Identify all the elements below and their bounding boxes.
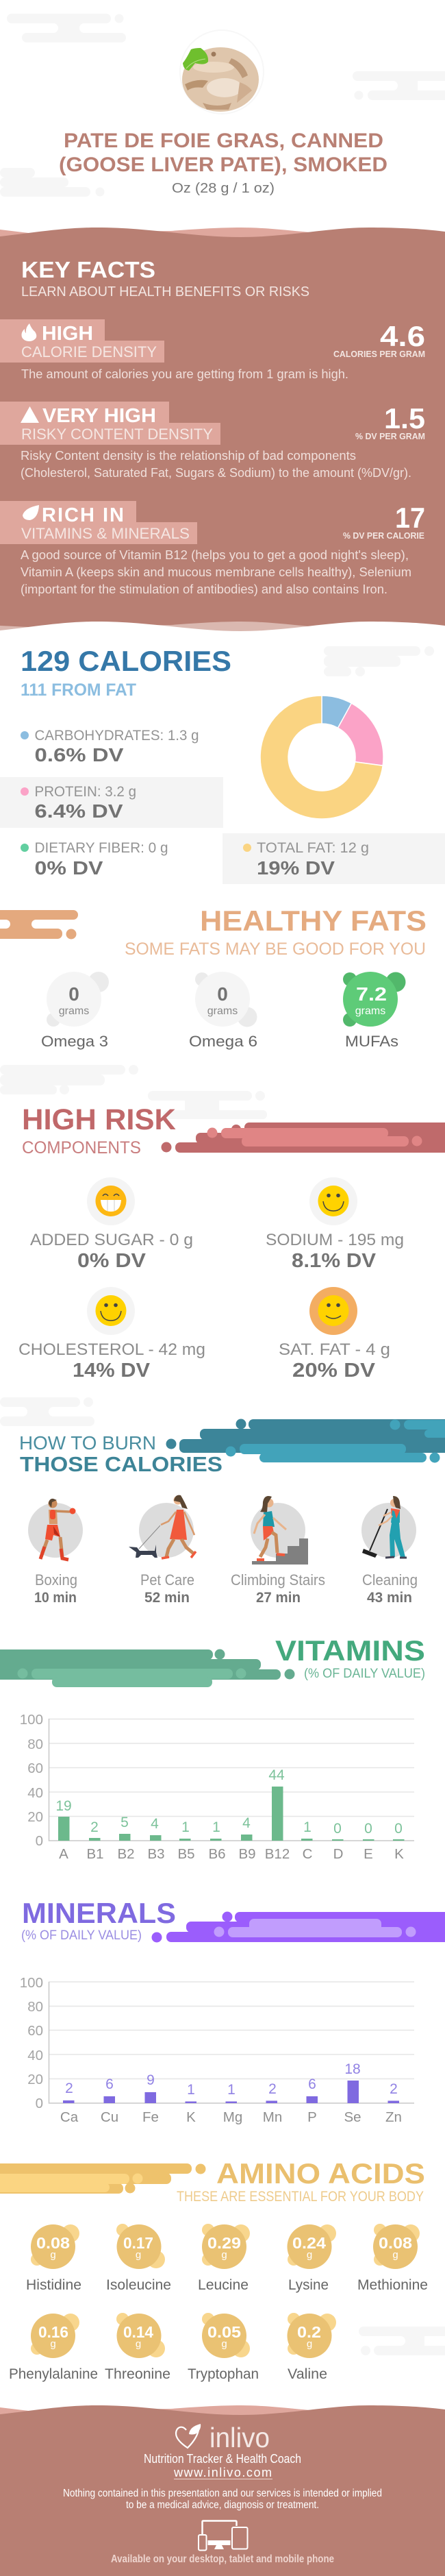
carbohydrates: CARBOHYDRATES: 1.3 g bbox=[34, 728, 199, 744]
heading: calories: 111 FROM FAT bbox=[21, 680, 136, 700]
amino bubbles: g bbox=[221, 2338, 227, 2350]
decoration: high risk bbox=[162, 1123, 445, 1153]
bar chart: minerals: 6 bbox=[308, 2076, 316, 2092]
decoration: vitamins bbox=[0, 1649, 294, 1687]
amino names: Lysine bbox=[288, 2277, 329, 2293]
icon: flame bbox=[22, 323, 36, 341]
bar chart: minerals: Fe bbox=[142, 2109, 159, 2125]
sodium: 8.1% DV bbox=[292, 1250, 377, 1272]
bar chart: vitamins: B6 bbox=[208, 1846, 226, 1862]
activity labels: Pet Care bbox=[140, 1571, 194, 1588]
logo bbox=[176, 2422, 270, 2453]
bar chart: minerals: Ca bbox=[60, 2109, 79, 2125]
heading: vitamins bbox=[275, 1634, 425, 1681]
heading: minerals bbox=[21, 1897, 176, 1943]
fact: vitamins and minerals: VITAMINS & MINERALS bbox=[21, 525, 190, 542]
bar chart: minerals: 80 bbox=[27, 1999, 43, 2015]
bar chart: minerals: 20 bbox=[27, 2072, 43, 2087]
bar chart: vitamins: C bbox=[303, 1846, 313, 1862]
activity durations: 43 min bbox=[367, 1590, 412, 1606]
title bbox=[59, 130, 387, 176]
activity: boxing bbox=[28, 1499, 83, 1560]
bar chart: vitamins: K bbox=[394, 1846, 404, 1862]
decoration: burn bbox=[166, 1419, 445, 1462]
bar chart: vitamins: 0 bbox=[364, 1821, 372, 1837]
activity labels bbox=[35, 1571, 418, 1588]
fact: risky content density: % DV PER GRAM bbox=[355, 431, 425, 441]
activity: cleaning bbox=[361, 1496, 416, 1558]
bar chart: minerals: 40 bbox=[27, 2048, 43, 2063]
donut chart bbox=[260, 696, 383, 819]
bar chart: vitamins: 44 bbox=[268, 1767, 285, 1783]
heading: amino acids bbox=[177, 2157, 425, 2205]
heading: burn bbox=[19, 1432, 222, 1476]
heading: high risk bbox=[22, 1103, 176, 1157]
disclaimer: to be a medical advice, diagnosis or treatment. bbox=[126, 2499, 319, 2511]
total fat bbox=[243, 840, 369, 879]
bar chart: minerals: 60 bbox=[27, 2023, 43, 2039]
sodium: SODIUM - 195 mg bbox=[266, 1231, 404, 1249]
saturated fat: SAT. FAT - 4 g bbox=[279, 1340, 390, 1359]
heading: amino acids: AMINO ACIDS bbox=[216, 2157, 425, 2189]
bar chart: minerals: 2 bbox=[65, 2081, 73, 2096]
bar chart: vitamins: B2 bbox=[117, 1846, 135, 1862]
heading: key facts bbox=[21, 257, 309, 299]
added sugar: ADDED SUGAR - 0 g bbox=[30, 1231, 193, 1249]
amino names: Phenylalanine bbox=[9, 2366, 98, 2382]
heading: calories bbox=[21, 645, 231, 700]
saturated fat: 20% DV bbox=[292, 1360, 376, 1382]
amino bubbles: g bbox=[136, 2338, 141, 2350]
amino bubbles: g bbox=[50, 2249, 56, 2261]
fact: vitamins and minerals: A good source of Vitamin B12 (helps you to get a good night's sleep), bbox=[21, 548, 409, 562]
amino names: Tryptophan bbox=[188, 2366, 259, 2382]
activity labels: Cleaning bbox=[362, 1571, 418, 1588]
amino bubbles: g bbox=[307, 2249, 312, 2261]
website link: www.inlivo.com bbox=[173, 2466, 272, 2479]
bar chart: minerals: K bbox=[186, 2109, 196, 2125]
activity durations: 10 min bbox=[34, 1590, 77, 1606]
omega 6: Omega 6 bbox=[189, 1033, 257, 1050]
fact: risky content density: 1.5 bbox=[384, 402, 425, 434]
sodium bbox=[266, 1177, 404, 1272]
panel: key facts bbox=[0, 228, 445, 634]
amino bubbles: 0.08 bbox=[379, 2234, 412, 2252]
icon: warning bbox=[21, 406, 39, 423]
bar chart: minerals: 2 bbox=[390, 2081, 398, 2097]
fact: risky content density: (Cholesterol, Saturated Fat, Sugars & Sodium) to the amount (%DV/gr). bbox=[21, 466, 411, 480]
activity durations: 52 min bbox=[144, 1590, 190, 1606]
amino names: Threonine bbox=[105, 2366, 170, 2382]
fact: calorie density: 4.6 bbox=[380, 320, 425, 352]
amino bubbles: 0.05 bbox=[207, 2323, 241, 2341]
amino names: Valine bbox=[288, 2366, 327, 2382]
fact: risky content density: RISKY CONTENT DENSITY bbox=[21, 426, 213, 443]
bar chart: vitamins bbox=[20, 1712, 414, 1862]
mufas: grams bbox=[355, 1005, 385, 1017]
cholesterol: 14% DV bbox=[73, 1360, 151, 1382]
protein: PROTEIN: 3.2 g bbox=[34, 784, 136, 800]
fact: calorie density bbox=[0, 319, 425, 381]
bar chart: vitamins: E bbox=[364, 1846, 373, 1862]
bar chart: minerals: Mg bbox=[223, 2109, 242, 2125]
heading: vitamins: (% OF DAILY VALUE) bbox=[304, 1667, 425, 1681]
bar chart: vitamins: A bbox=[59, 1846, 68, 1862]
bar chart: vitamins: B3 bbox=[147, 1846, 165, 1862]
amino names: Histidine bbox=[26, 2277, 81, 2293]
omega 6 bbox=[189, 972, 257, 1050]
amino bubbles: 0.2 bbox=[297, 2323, 321, 2341]
heading: healthy fats bbox=[125, 905, 427, 959]
omega 6: grams bbox=[207, 1005, 238, 1017]
omega 3 bbox=[41, 972, 109, 1050]
bar chart: vitamins: 60 bbox=[27, 1761, 43, 1776]
fact: risky content density: VERY HIGH bbox=[42, 405, 156, 427]
fact: vitamins and minerals: Vitamin A (keeps skin and mucous membrane cells healthy), Selenium bbox=[21, 565, 411, 579]
amino bubbles bbox=[31, 2224, 420, 2358]
bar chart: minerals: Zn bbox=[385, 2109, 402, 2125]
heading: high risk: COMPONENTS bbox=[22, 1138, 141, 1157]
fact: vitamins and minerals: (important for the stimulation of antibodies) and also contains Iron. bbox=[21, 582, 387, 596]
panel: burn calories bbox=[19, 1419, 445, 1606]
title: (GOOSE LIVER PATE), SMOKED bbox=[59, 154, 387, 176]
bar chart: vitamins: 4 bbox=[151, 1816, 159, 1832]
bar chart: minerals bbox=[20, 1975, 414, 2125]
bar chart: minerals: Mn bbox=[263, 2109, 282, 2125]
fact: calorie density: The amount of calories you are getting from 1 gram is high. bbox=[21, 367, 348, 381]
bar chart: minerals: Cu bbox=[101, 2109, 118, 2125]
amino bubbles: g bbox=[307, 2338, 312, 2350]
amino bubbles: 0.14 bbox=[123, 2323, 153, 2341]
amino bubbles: 0.17 bbox=[123, 2234, 153, 2252]
decoration: minerals bbox=[152, 1912, 445, 1942]
bar chart: minerals: 2 bbox=[268, 2081, 277, 2097]
panel: calories bbox=[0, 645, 445, 884]
heading: high risk: HIGH RISK bbox=[22, 1103, 176, 1136]
mufas: 7.2 bbox=[356, 983, 387, 1005]
bar chart: minerals: 9 bbox=[147, 2072, 155, 2088]
heading: minerals: MINERALS bbox=[22, 1897, 176, 1929]
bar chart: vitamins: D bbox=[333, 1846, 343, 1862]
amino bubbles: 0.08 bbox=[36, 2234, 70, 2252]
tagline: Nutrition Tracker & Health Coach bbox=[144, 2452, 301, 2466]
bar chart: vitamins: 80 bbox=[27, 1737, 43, 1752]
total fat: TOTAL FAT: 12 g bbox=[257, 840, 369, 856]
amino bubbles: g bbox=[136, 2249, 141, 2261]
panel: vitamins bbox=[0, 1634, 425, 1862]
bar chart: vitamins: 40 bbox=[27, 1785, 43, 1801]
omega 3: 0 bbox=[68, 983, 79, 1005]
bar chart: vitamins: 1 bbox=[181, 1819, 190, 1835]
protein bbox=[21, 784, 136, 822]
bar chart: vitamins: 1 bbox=[303, 1819, 312, 1835]
amino bubbles: g bbox=[392, 2249, 398, 2261]
carbohydrates: 0.6% DV bbox=[34, 744, 124, 765]
amino names bbox=[9, 2277, 428, 2382]
mufas: MUFAs bbox=[345, 1033, 398, 1050]
bar chart: vitamins: 100 bbox=[20, 1712, 43, 1728]
title: PATE DE FOIE GRAS, CANNED bbox=[64, 130, 383, 152]
logo: inlivo bbox=[209, 2422, 270, 2453]
bar chart: vitamins: B1 bbox=[86, 1846, 104, 1862]
bar chart: vitamins: 4 bbox=[242, 1815, 251, 1831]
bar chart: vitamins: 0 bbox=[36, 1833, 43, 1849]
heading: burn: THOSE CALORIES bbox=[20, 1452, 222, 1476]
activity durations bbox=[34, 1590, 412, 1606]
amino bubbles: g bbox=[221, 2249, 227, 2261]
bar chart: minerals: 6 bbox=[105, 2076, 114, 2092]
panel: amino acids bbox=[0, 2157, 445, 2382]
icon: devices bbox=[199, 2520, 248, 2551]
amino bubbles: 0.16 bbox=[38, 2323, 68, 2341]
amino names: Methionine bbox=[357, 2277, 428, 2293]
carbohydrates bbox=[21, 728, 199, 765]
mufas bbox=[343, 972, 405, 1050]
activity labels: Climbing Stairs bbox=[231, 1571, 325, 1588]
bar chart: minerals: 100 bbox=[20, 1975, 43, 1991]
decoration: amino acids bbox=[0, 2163, 205, 2194]
fact: vitamins and minerals: % DV PER CALORIE bbox=[343, 530, 424, 541]
disclaimer: Nothing contained in this presentation and our services is intended or implied bbox=[63, 2488, 382, 2499]
heading: burn: HOW TO BURN bbox=[19, 1432, 156, 1453]
bar chart: vitamins: 5 bbox=[120, 1815, 129, 1830]
omega 3: Omega 3 bbox=[41, 1033, 108, 1050]
fact: calorie density: CALORIE DENSITY bbox=[21, 343, 157, 360]
availability note: Available on your desktop, tablet and mobile phone bbox=[111, 2553, 334, 2565]
bar chart: vitamins: 0 bbox=[394, 1821, 403, 1837]
dietary fiber: 0% DV bbox=[34, 857, 103, 879]
fact: risky content density: Risky Content density is the relationship of bad components bbox=[21, 449, 356, 463]
activity labels: Boxing bbox=[35, 1571, 77, 1588]
bar chart: vitamins: 20 bbox=[27, 1809, 43, 1825]
saturated fat bbox=[279, 1287, 390, 1382]
amino bubbles: g bbox=[50, 2338, 56, 2350]
protein: 6.4% DV bbox=[34, 800, 123, 822]
added sugar: 0% DV bbox=[77, 1250, 147, 1272]
bar chart: minerals: 0 bbox=[36, 2096, 43, 2111]
bar chart: vitamins: B9 bbox=[238, 1846, 256, 1862]
bar chart: vitamins: 0 bbox=[333, 1821, 342, 1837]
fact: calorie density: CALORIES PER GRAM bbox=[333, 349, 425, 359]
omega 6: 0 bbox=[217, 983, 228, 1005]
total fat: 19% DV bbox=[257, 857, 335, 879]
disclaimer bbox=[63, 2488, 382, 2511]
dietary fiber bbox=[21, 840, 168, 879]
footer bbox=[0, 2405, 445, 2576]
food photo bbox=[182, 47, 259, 112]
bar chart: minerals: P bbox=[307, 2109, 317, 2125]
icon: leaf bbox=[23, 505, 39, 520]
cholesterol: CHOLESTEROL - 42 mg bbox=[18, 1340, 205, 1359]
dietary fiber: DIETARY FIBER: 0 g bbox=[34, 840, 168, 856]
heading: vitamins: VITAMINS bbox=[275, 1634, 425, 1667]
amino names: Leucine bbox=[198, 2277, 249, 2293]
activity durations: 27 min bbox=[256, 1590, 301, 1606]
added sugar bbox=[30, 1177, 193, 1272]
bar chart: minerals: Se bbox=[344, 2109, 361, 2125]
panel: high risk bbox=[18, 1103, 445, 1382]
cholesterol bbox=[18, 1287, 205, 1382]
bar chart: vitamins: 1 bbox=[212, 1819, 220, 1835]
omega 3: grams bbox=[59, 1005, 89, 1017]
bar chart: minerals: 1 bbox=[187, 2082, 195, 2098]
serving size: Oz (28 g / 1 oz) bbox=[172, 181, 275, 196]
activity: climbing stairs bbox=[251, 1496, 308, 1565]
panel: minerals bbox=[20, 1897, 445, 2125]
bar chart: vitamins: 19 bbox=[55, 1798, 72, 1814]
amino bubbles: 0.24 bbox=[292, 2234, 326, 2252]
bar chart: vitamins: 2 bbox=[90, 1819, 99, 1835]
heading: minerals: (% OF DAILY VALUE) bbox=[21, 1928, 142, 1943]
fact: vitamins and minerals: RICH IN bbox=[42, 504, 124, 526]
fact: calorie density: HIGH bbox=[42, 323, 93, 345]
bar chart: minerals: 18 bbox=[344, 2061, 361, 2077]
bar chart: vitamins: B5 bbox=[177, 1846, 195, 1862]
heading: key facts: LEARN ABOUT HEALTH BENEFITS OR RISKS bbox=[21, 284, 309, 299]
heading: key facts: KEY FACTS bbox=[21, 257, 155, 282]
heading: healthy fats: SOME FATS MAY BE GOOD FOR YOU bbox=[125, 940, 426, 959]
fact: risky content density bbox=[0, 402, 425, 480]
heading: calories: 129 CALORIES bbox=[21, 645, 231, 677]
panel: healthy fats bbox=[0, 905, 427, 1050]
fact: vitamins and minerals bbox=[0, 501, 425, 596]
amino bubbles: 0.29 bbox=[207, 2234, 241, 2252]
bar chart: vitamins: B12 bbox=[265, 1846, 290, 1862]
amino names: Isoleucine bbox=[106, 2277, 171, 2293]
decoration: healthy fats bbox=[0, 910, 78, 939]
bar chart: minerals: 1 bbox=[227, 2082, 236, 2098]
activity: pet care bbox=[129, 1495, 196, 1558]
heading: healthy fats: HEALTHY FATS bbox=[200, 905, 427, 937]
fact: vitamins and minerals: 17 bbox=[395, 502, 425, 534]
